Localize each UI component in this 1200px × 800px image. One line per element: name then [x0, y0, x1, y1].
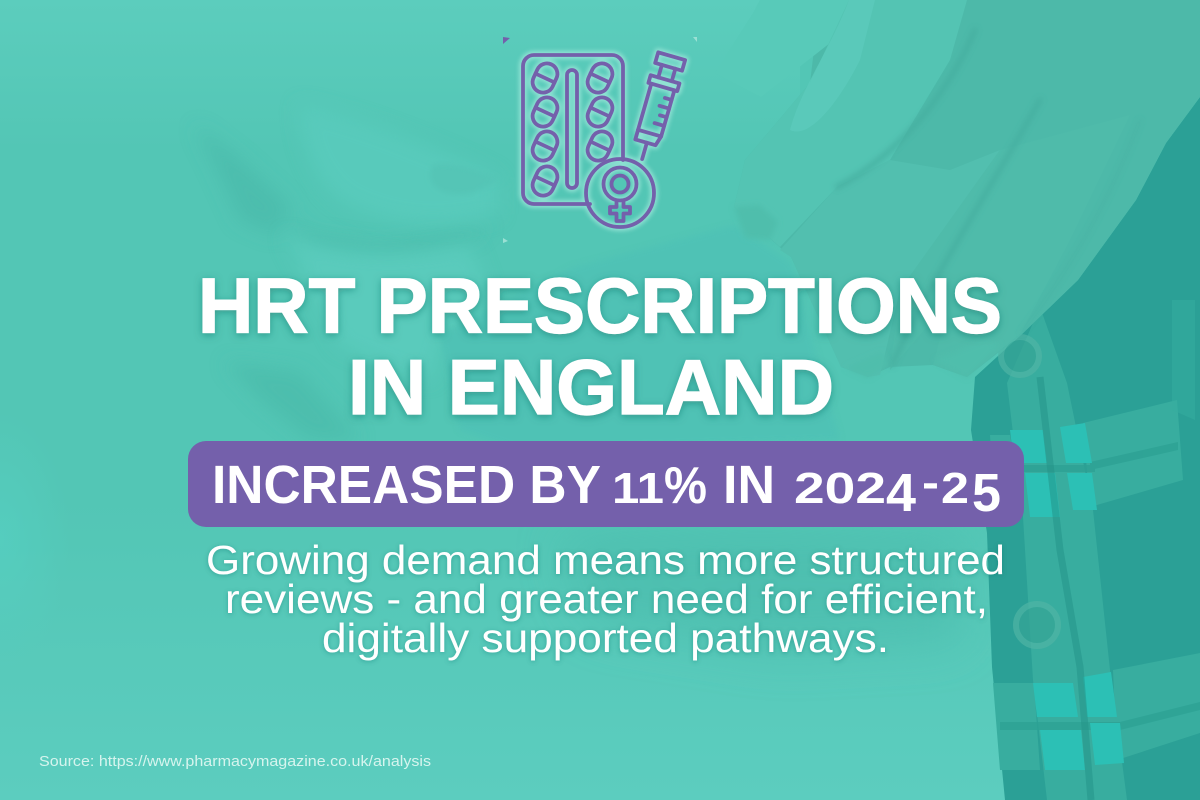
- subtitle text: reviews - and greater need for efficient,: [225, 576, 988, 622]
- callout: increase banner: 4: [886, 463, 916, 523]
- callout: increase banner: 2: [941, 464, 969, 513]
- subtitle text: Growing demand means more structured: [206, 537, 1005, 583]
- fleece lower area: [0, 410, 1010, 800]
- callout: increase banner: -: [922, 458, 939, 507]
- title: [198, 262, 1002, 431]
- bandage patch: [440, 225, 840, 450]
- icon glow: [523, 52, 686, 227]
- finger nails: [734, 205, 1000, 378]
- palm: [285, 235, 490, 380]
- shirt plaid bands: [990, 307, 1200, 800]
- syringe: [628, 52, 686, 163]
- title: IN ENGLAND: [348, 343, 834, 431]
- callout: increase banner: 11: [612, 464, 664, 513]
- callout: increase banner: INCREASED BY: [212, 455, 601, 515]
- callout: increase banner: IN: [723, 455, 775, 515]
- callout: increase banner: 5: [972, 463, 1001, 523]
- icon corner marks: [503, 37, 697, 243]
- callout: increase banner: [188, 441, 1024, 527]
- subtitle text: [206, 537, 1005, 661]
- thumb: [300, 105, 497, 224]
- shirt buttons: [1001, 337, 1058, 646]
- top area: [0, 0, 800, 150]
- blister pack: [523, 55, 623, 204]
- female symbol circle: [586, 159, 654, 227]
- shirt bright squares: [1010, 423, 1124, 770]
- callout: increase banner: 202: [794, 464, 886, 513]
- callout: increase banner: %: [664, 457, 707, 515]
- thumb nail: [430, 164, 497, 194]
- title: HRT PRESCRIPTIONS: [198, 262, 1002, 350]
- subtitle text: digitally supported pathways.: [322, 615, 889, 661]
- hand creases and shadows: [195, 125, 490, 440]
- finger gaps: [837, 30, 1140, 365]
- right hand: [715, 0, 1200, 377]
- icon: HRT pill blister, syringe and female symbol: [503, 37, 697, 243]
- source note: Source: https://www.pharmacymagazine.co.uk/analysis: [39, 753, 431, 770]
- shirt: [971, 97, 1200, 800]
